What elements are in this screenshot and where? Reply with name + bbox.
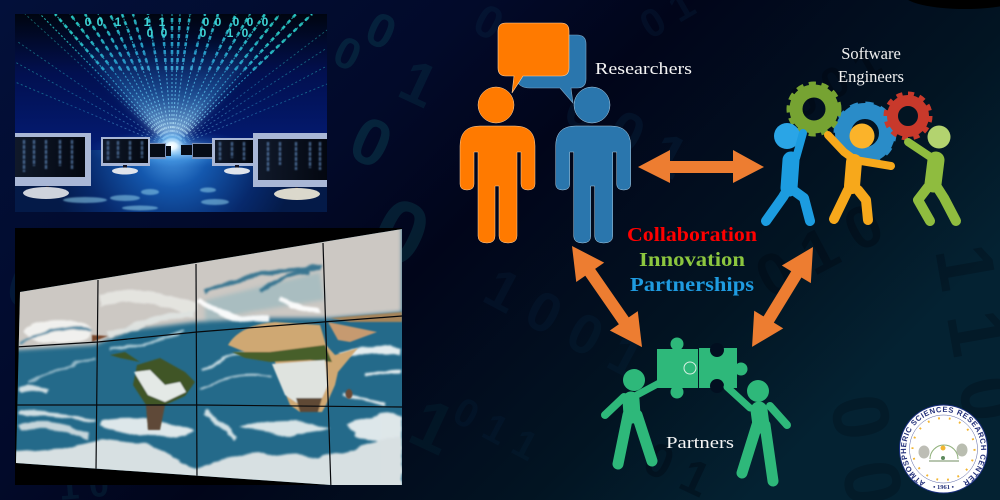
background: 1 [399, 383, 467, 470]
label: researchers: Researchers [595, 59, 692, 78]
background: 0 0 1 [780, 37, 890, 129]
arrow: software engineers to partners [738, 238, 828, 356]
background: 0 1 1 [446, 389, 545, 470]
background: 0 0 1 [554, 74, 698, 192]
software engineers group [766, 44, 956, 221]
icon: blue researcher [556, 87, 631, 243]
icon: puzzle pieces [657, 338, 748, 398]
right monitors [181, 133, 327, 200]
arrow: researchers to software engineers [638, 150, 764, 183]
photo: monitors and binary data: 0 [97, 15, 104, 29]
background: 0 [326, 27, 369, 81]
label: software engineers: Engineers [838, 67, 904, 86]
screen bezels [15, 243, 402, 490]
icon: left partner [605, 369, 663, 464]
South America [133, 358, 195, 430]
icon: yellow engineer [828, 124, 891, 220]
photo: monitors and binary data: 0 [247, 15, 254, 29]
background: 0 [339, 101, 404, 183]
photo: monitors and binary data: 1 [159, 15, 166, 29]
photo: monitors and binary data: 0 [233, 15, 240, 29]
icon: orange researcher [460, 87, 535, 243]
logo: atmospheric sciences research center seal: • 1961 • [933, 484, 955, 491]
photo: monitors and binary data: 0 [203, 15, 210, 29]
icon: green gear [789, 84, 839, 134]
photo: monitors and binary data [15, 14, 327, 212]
Africa [228, 322, 358, 412]
icon: green engineer [908, 126, 956, 221]
left monitors [15, 133, 171, 199]
photo: monitors and binary data: 0 [262, 15, 269, 29]
background: 0 [357, 177, 444, 289]
center text: collaboration innovation partnerships: Collaboration [627, 224, 757, 246]
icon: red gear [886, 94, 930, 138]
arrow: researchers to partners [558, 236, 656, 357]
center text: collaboration innovation partnerships [627, 224, 757, 296]
center text: collaboration innovation partnerships: Innovation [639, 249, 745, 271]
icon: blue speech bubble [516, 35, 586, 103]
photo: world map video wall [10, 225, 402, 495]
label: software engineers: Software [841, 44, 901, 63]
photo: monitors and binary data: 1 [227, 26, 234, 40]
photo: monitors and binary data: 0 [161, 26, 168, 40]
photo: monitors and binary data: 0 [85, 15, 92, 29]
clouds and ocean swirls [10, 268, 402, 495]
background: 0 1 0 [745, 190, 894, 311]
icon: blue gear [836, 104, 894, 162]
photo: monitors and binary data: 1 [115, 15, 122, 29]
icon: right partner [727, 380, 787, 481]
icon: orange speech bubble [498, 23, 569, 93]
label: partners: Partners [666, 433, 734, 452]
center text: collaboration innovation partnerships: Partnerships [630, 274, 754, 296]
photo: monitors and binary data: 0 [215, 15, 222, 29]
photo: monitors and binary data: 0 [242, 26, 249, 40]
background: 1 [390, 46, 448, 121]
background: 1 0 0 1 [474, 255, 655, 391]
researchers group [460, 23, 692, 243]
northern cloud band [15, 225, 402, 350]
photo: monitors and binary data: 0 [200, 26, 207, 40]
icon: blue engineer [766, 123, 810, 221]
partners group [605, 338, 787, 481]
photo: monitors and binary data: 0 [147, 26, 154, 40]
logo: atmospheric sciences research center seal: ATMOSPHERIC SCIENCES RESEARCH CENTER [900, 406, 986, 486]
photo: monitors and binary data: 1 [144, 15, 151, 29]
background: 0 [357, 2, 404, 61]
